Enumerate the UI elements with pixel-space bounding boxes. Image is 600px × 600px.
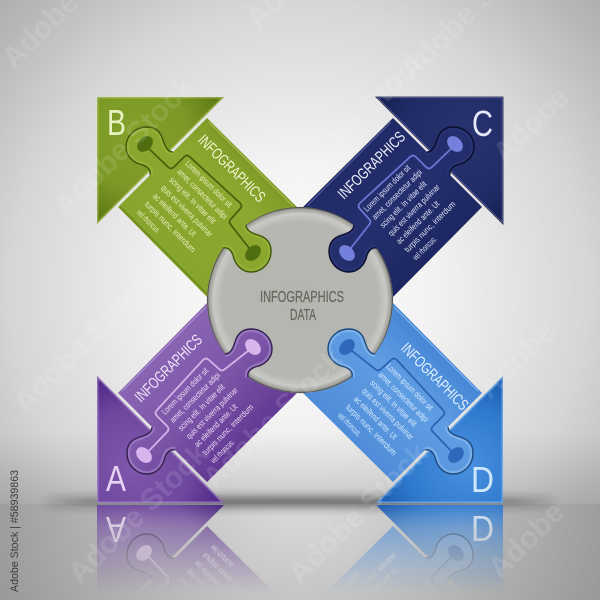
watermark: Adobe Stock [282, 42, 435, 195]
text block D: ac eleifend ante. Ut [352, 394, 400, 442]
reflection of arrow A [97, 505, 268, 588]
text block D: Lorem ipsum dolor sit [384, 361, 436, 413]
reflected letter D: D [471, 508, 494, 549]
watermark: Adobe Stock [62, 437, 215, 590]
text block A: Lorem ipsum dolor sit [159, 365, 211, 417]
text block B: vel rhoncus. [135, 207, 163, 236]
text block B: amet, consectetur adipi [175, 167, 230, 221]
heading A: INFOGRAPHICS [132, 332, 206, 406]
arrow C shapes [303, 97, 503, 297]
text block D: turpis nunc, interdum [344, 402, 399, 457]
text block C: ac eleifend ante. Ut [394, 198, 442, 246]
text block B: quis est viverra pulvinar [159, 183, 215, 239]
text block D: scing elit. In vitae elit [368, 378, 419, 429]
disc label: INFOGRAPHICS [260, 289, 344, 306]
text block C: amet, consectetur adipi [370, 167, 424, 222]
horizon shadow [45, 498, 555, 506]
watermark: Adobe [472, 316, 561, 405]
reflected text D: vel rhoncus. [336, 569, 364, 598]
text block C: Lorem ipsum dolor sit [361, 162, 413, 214]
text block C: vel rhoncus. [410, 234, 439, 262]
letter A: A [106, 458, 126, 499]
reflected A shapes [97, 505, 268, 588]
text block B [135, 158, 239, 263]
text block C: turpis nunc, interdum [402, 199, 457, 254]
reflected text D: nunc, interdum [364, 551, 399, 586]
text block B: turpis nunc, interdum [143, 199, 198, 254]
text block A: amet, consectetur adipi [168, 370, 222, 425]
text block D: quis est viverra pulvinar [360, 386, 416, 442]
watermark: Adobe Stock [48, 70, 201, 223]
text block C [361, 158, 466, 262]
reflected D shapes [332, 505, 503, 588]
reflected text A: vel rhoncus. [208, 543, 237, 571]
letter B: B [107, 102, 126, 143]
arrow B shapes [97, 97, 297, 297]
text block C: scing elit. In vitae elit [378, 179, 429, 230]
reflected text A [174, 545, 240, 588]
reflected text D: eifend ante. Ut [370, 566, 400, 596]
watermark: Adobe [487, 81, 576, 170]
reflected text D [346, 552, 397, 586]
text block B: ac eleifend ante. Ut [151, 191, 199, 239]
text block D [336, 361, 440, 466]
stock credit: Adobe Stock | #58939863 [9, 470, 21, 592]
arrow A shapes [97, 303, 297, 503]
text block B: Lorem ipsum dolor sit [183, 158, 235, 210]
horizon dimming [0, 430, 600, 504]
text block A [159, 361, 264, 465]
text block A: quis est viverra pulvinar [184, 385, 240, 441]
floor reflection of arrows A and D [97, 505, 503, 588]
arrow C: navy, top right [303, 97, 503, 297]
arrow B: green, top left [97, 97, 297, 297]
reflected letter A: A [106, 509, 126, 550]
text block A: turpis nunc, interdum [200, 402, 255, 457]
heading C: INFOGRAPHICS [335, 129, 409, 203]
letter C: C [472, 103, 493, 144]
text block C: quis est viverra pulvinar [386, 182, 442, 238]
watermark: Adobe Stock [7, 267, 160, 420]
text block A: ac eleifend ante. Ut [192, 401, 240, 449]
arrow D: blue, bottom right [303, 303, 503, 503]
watermark: Adobe Stock [282, 437, 435, 590]
reflection of arrow D [332, 505, 503, 588]
disc label [260, 289, 344, 324]
watermark: Adobe Stock [197, 342, 350, 495]
reflective floor [0, 504, 600, 600]
text block D: vel rhoncus. [336, 410, 364, 439]
diagram: four arrows and central disc [97, 97, 503, 503]
disc label: DATA [290, 307, 316, 324]
letter D: D [471, 459, 494, 500]
heading B: INFOGRAPHICS [194, 132, 268, 206]
text block D: amet, consectetur adipi [376, 370, 431, 424]
text block B: scing elit. In vitae elit [167, 175, 218, 226]
text block A: scing elit. In vitae elit [176, 382, 227, 433]
arrow D shapes [303, 303, 503, 503]
watermark: Adobe [482, 496, 571, 585]
text block A: vel rhoncus. [208, 437, 237, 465]
central disc [208, 208, 392, 392]
heading D: INFOGRAPHICS [397, 340, 471, 414]
arrow A: purple, bottom left [97, 303, 297, 503]
